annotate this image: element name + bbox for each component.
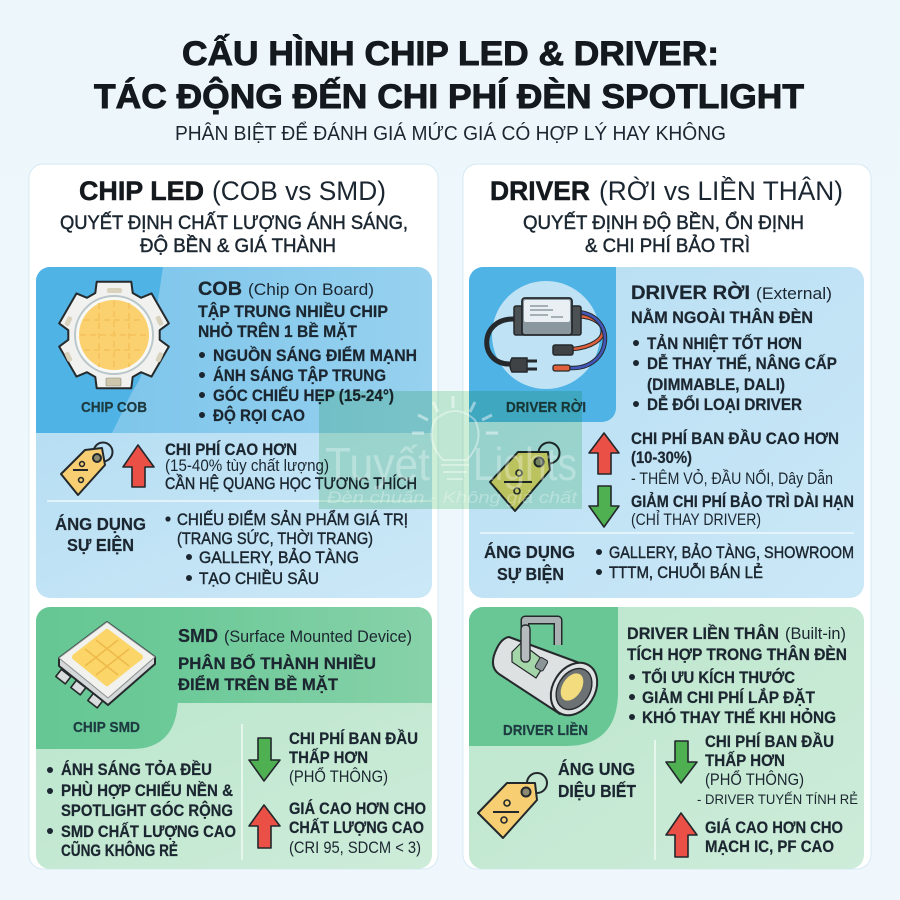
text: SMD low cost: THẤP HƠN — [289, 748, 368, 767]
heading: chip LED: (COB vs SMD) — [212, 176, 386, 206]
text: SMD high cost — [289, 799, 426, 857]
subtitle: PHÂN BIỆT ĐỂ ĐÁNH GIÁ MỨC GIÁ CÓ HỢP LÝ HAY KHÔNG — [175, 122, 726, 145]
panel: COB — [36, 267, 432, 598]
title — [94, 35, 804, 116]
text: external driver application label: ÁNG DỤNG — [484, 541, 575, 562]
text: external driver description: DỄ ĐỔI LOẠI DRIVER — [647, 395, 802, 414]
text: external driver description: DRIVER RỜI — [631, 282, 750, 304]
text: built-in driver description: (Built-in) — [785, 625, 846, 643]
list: SMD features: PHÙ HỢP CHIẾU NỀN & — [61, 781, 233, 800]
panel: driver column — [463, 164, 871, 869]
list: COB applications: GALLERY, BẢO TÀNG — [199, 548, 359, 567]
heading: driver: QUYẾT ĐỊNH ĐỘ BỀN, ỔN ĐỊNH — [523, 212, 804, 234]
text: SMD description: (Surface Mounted Device) — [224, 628, 412, 646]
text: COB description: NGUỒN SÁNG ĐIỂM MẠNH — [213, 346, 417, 365]
text: SMD low cost: (PHỔ THÔNG) — [289, 767, 388, 786]
text: SMD high cost: GIÁ CAO HƠN CHO — [289, 799, 426, 818]
text: built-in driver application label: DIỆU BIẾT — [558, 780, 636, 801]
heading: chip LED: CHIP LED — [79, 176, 204, 206]
text: built-in driver high cost: MẠCH IC, PF CAO — [705, 838, 834, 856]
text: SMD high cost: CHẤT LƯỢNG CAO — [289, 818, 424, 837]
icon: SMD chip — [56, 622, 155, 708]
label: chip SMD: CHIP SMD — [73, 719, 140, 736]
list: COB applications: (TRANG SỨC, THỜI TRANG) — [177, 529, 373, 548]
label: external driver: DRIVER RỜI — [506, 398, 586, 416]
heading: driver: (RỜI vs LIỀN THÂN) — [599, 175, 843, 206]
list: COB applications — [165, 510, 408, 588]
text: built-in driver description: GIẢM CHI PHÍ LẮP ĐẶT — [642, 688, 815, 707]
text: external driver cost: GIẢM CHI PHÍ BẢO TRÌ DÀI HẠN — [631, 492, 854, 511]
watermark — [319, 391, 582, 509]
title: CẤU HÌNH CHIP LED & DRIVER: — [182, 35, 719, 73]
text: built-in driver low cost: THẤP HƠN — [705, 751, 785, 770]
text: SMD high cost: (CRI 95, SDCM < 3) — [289, 839, 421, 857]
label: chip COB: CHIP COB — [81, 399, 147, 416]
text: external driver description: TẢN NHIỆT TỐT HƠN — [647, 333, 802, 353]
icon: down arrow — [666, 741, 697, 783]
text: SMD low cost — [289, 729, 418, 786]
text: COB description: GÓC CHIẾU HẸP (15-24°) — [213, 386, 394, 405]
text: built-in driver low cost: CHI PHÍ BAN ĐẦU — [705, 732, 834, 751]
icon: price tag — [478, 773, 547, 838]
text: built-in driver low cost: (PHỔ THÔNG) — [705, 770, 804, 789]
watermark: Tuyết — [325, 438, 430, 490]
panel: chip LED column — [29, 164, 438, 869]
icon: down arrow — [589, 486, 619, 527]
icon: COB chip — [59, 282, 169, 388]
text: external driver description: DỄ THAY THẾ, NÂNG CẤP — [647, 354, 837, 373]
text: external driver description: (External) — [756, 284, 832, 303]
text: COB cost: (15-40% tùy chất lượng) — [165, 457, 329, 475]
text: COB description: (Chip On Board) — [248, 280, 374, 299]
text: COB cost — [165, 440, 417, 493]
text: external driver cost: (10-30%) — [631, 449, 692, 467]
text: built-in driver low cost: - DRIVER TUYẾN TÍNH RẺ — [697, 791, 858, 807]
text: external driver description: (DIMMABLE, DALI) — [647, 376, 785, 394]
text: built-in driver high cost — [705, 818, 843, 856]
heading: chip LED: QUYẾT ĐỊNH CHẤT LƯỢNG ÁNH SÁNG, — [60, 212, 408, 234]
list: SMD features: SMD CHẤT LƯỢNG CAO — [61, 822, 236, 841]
list: SMD features — [47, 760, 236, 860]
list: COB applications: CHIẾU ĐIỂM SẢN PHẨM GIÁ TRỊ — [177, 510, 408, 529]
text: COB cost: CHI PHÍ CAO HƠN — [165, 440, 297, 459]
icon: external driver — [487, 298, 605, 372]
heading: driver — [490, 175, 843, 257]
heading: chip LED: ĐỘ BỀN & GIÁ THÀNH — [140, 235, 336, 257]
icon: up arrow — [666, 813, 697, 857]
text: built-in driver high cost: GIÁ CAO HƠN CHO — [705, 818, 843, 837]
title: TÁC ĐỘNG ĐẾN CHI PHÍ ĐÈN SPOTLIGHT — [94, 77, 804, 116]
text: COB application label: ÁNG DỤNG — [55, 513, 146, 534]
text: COB description: ĐỘ RỌI CAO — [213, 406, 305, 425]
list: external driver applications — [596, 543, 854, 582]
text: SMD description: SMD — [178, 626, 218, 646]
icon: price tag — [490, 442, 560, 511]
text: COB description — [198, 279, 417, 425]
text: external driver application label — [484, 541, 575, 584]
text: COB cost: CẦN HỆ QUANG HỌC TƯƠNG THÍCH — [165, 474, 417, 493]
text: built-in driver application label — [558, 758, 636, 801]
text: SMD low cost: CHI PHÍ BAN ĐẦU — [289, 729, 418, 748]
text: external driver application label: SỰ BIỆN — [497, 563, 564, 584]
text: built-in driver description: TỐI ƯU KÍCH THƯỚC — [642, 667, 795, 687]
list: external driver applications: GALLERY, BẢO TÀNG, SHOWROOM — [609, 543, 854, 562]
icon: down arrow — [249, 738, 280, 781]
list: SMD features: CŨNG KHÔNG RẺ — [61, 840, 178, 860]
text: external driver description: NẰM NGOÀI THÂN ĐÈN — [631, 308, 813, 327]
text: built-in driver description: KHÓ THAY THẾ KHI HỎNG — [642, 708, 836, 727]
text: built-in driver description: DRIVER LIỀN THÂN — [627, 624, 779, 643]
icon: price tag — [61, 442, 112, 495]
text: SMD description: PHÂN BỐ THÀNH NHIỀU — [178, 653, 376, 673]
heading: driver: & CHI PHÍ BẢO TRÌ — [585, 235, 750, 257]
text: COB description: TẬP TRUNG NHIỀU CHIP — [198, 302, 388, 321]
icon: spotlight — [493, 620, 607, 724]
text: COB description: NHỎ TRÊN 1 BỀ MẶT — [198, 322, 357, 341]
list: SMD features: SPOTLIGHT GÓC RỘNG — [61, 801, 233, 820]
text: COB application label: SỰ EIỆN — [67, 534, 134, 555]
panel: SMD — [36, 607, 432, 869]
list: COB applications: TẠO CHIỀU SÂU — [199, 569, 319, 588]
list: external driver applications: TTTM, CHUỖI BÁN LẺ — [609, 563, 763, 582]
text: COB description: ÁNH SÁNG TẬP TRUNG — [213, 366, 386, 385]
text: COB description: COB — [198, 279, 242, 300]
heading: chip LED — [60, 176, 408, 257]
text: built-in driver application label: ÁNG UNG — [558, 758, 635, 779]
text: built-in driver low cost — [697, 732, 858, 807]
label: built-in driver: DRIVER LIỀN — [503, 722, 588, 739]
text: external driver cost: - THÊM VỎ, ĐẦU NỐI, Dây Dẫn — [631, 468, 833, 488]
panel: built-in driver — [469, 607, 864, 869]
heading: driver: DRIVER — [490, 176, 590, 206]
text: external driver cost: (CHỈ THAY DRIVER) — [631, 510, 761, 529]
watermark: Lights — [473, 438, 577, 490]
text: built-in driver description: TÍCH HỢP TRONG THÂN ĐÈN — [627, 645, 847, 664]
text: external driver description — [631, 282, 837, 414]
icon: up arrow — [589, 433, 619, 474]
list: SMD features: ÁNH SÁNG TỎA ĐỀU — [61, 760, 212, 779]
text: SMD description: ĐIỂM TRÊN BỀ MẶT — [178, 675, 338, 694]
watermark: Đèn chuẩn - Không giả chất — [327, 488, 579, 507]
text: external driver cost — [631, 429, 854, 529]
text: SMD description — [178, 626, 412, 694]
panel: external driver — [469, 267, 864, 598]
text: built-in driver description — [627, 624, 847, 727]
text: COB application label — [55, 513, 146, 555]
icon: up arrow — [249, 805, 280, 848]
text: external driver cost: CHI PHÍ BAN ĐẦU CAO HƠN — [631, 429, 839, 448]
icon: up arrow — [123, 445, 154, 487]
